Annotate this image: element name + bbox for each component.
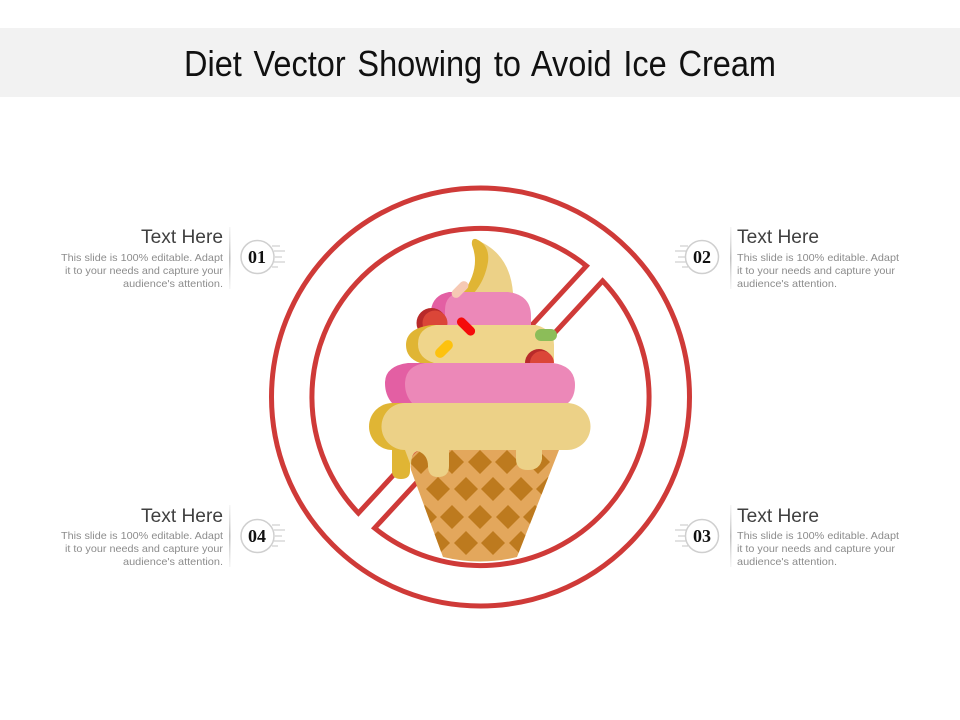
- heading 04: Text Here: [141, 506, 223, 527]
- icon: ice cream cone: [369, 239, 590, 570]
- heading 01: Text Here: [141, 227, 223, 248]
- cherry right: [525, 349, 554, 363]
- callout 03: [675, 505, 899, 568]
- cream bottom layer with drips: [369, 403, 590, 479]
- number badge 01: 01: [248, 247, 266, 267]
- body text 01: it to your needs and capture your: [65, 265, 224, 277]
- number badge 02: [675, 240, 718, 274]
- title: Diet Vector Showing to Avoid Ice Cream: [184, 43, 776, 84]
- cream middle layer: [406, 325, 554, 363]
- number badge 02: 02: [693, 247, 711, 267]
- body text 01: audience's attention.: [123, 278, 223, 290]
- number badge 03: 03: [693, 526, 711, 546]
- top swirl: [463, 239, 513, 293]
- number badge 04: [241, 520, 285, 552]
- sprinkle: peach: [450, 279, 470, 300]
- title banner: [0, 28, 960, 97]
- body text 02: This slide is 100% editable. Adapt: [737, 252, 899, 264]
- body text 04: it to your needs and capture your: [65, 543, 224, 555]
- heading 03: Text Here: [737, 506, 819, 527]
- callout 04: [61, 505, 285, 568]
- pink lower layer: [385, 363, 575, 403]
- cherry left: [416, 308, 448, 338]
- body text 03: it to your needs and capture your: [737, 543, 896, 555]
- body text 02: it to your needs and capture your: [737, 265, 896, 277]
- body text 03: audience's attention.: [737, 556, 837, 568]
- body text 04: [61, 530, 224, 568]
- callout 01: [61, 227, 285, 290]
- body text 02: audience's attention.: [737, 278, 837, 290]
- pink top layer: [431, 292, 531, 325]
- heading 02: Text Here: [737, 227, 819, 248]
- number badge 04: 04: [248, 526, 266, 546]
- body text 02: [737, 252, 899, 290]
- sprinkle: yellow: [433, 338, 455, 360]
- body text 03: This slide is 100% editable. Adapt: [737, 530, 899, 542]
- body text 03: [737, 530, 899, 568]
- body text 01: [61, 252, 224, 290]
- sprinkle: green: [535, 329, 557, 341]
- body text 04: This slide is 100% editable. Adapt: [61, 530, 223, 542]
- sprinkle: red: [455, 316, 477, 337]
- callout 02: [675, 227, 899, 290]
- body text 04: audience's attention.: [123, 556, 223, 568]
- number badge 01: [241, 240, 285, 274]
- number badge 03: [675, 520, 718, 552]
- body text 01: This slide is 100% editable. Adapt: [61, 252, 223, 264]
- prohibition sign: [272, 188, 690, 606]
- waffle cone: [410, 450, 559, 562]
